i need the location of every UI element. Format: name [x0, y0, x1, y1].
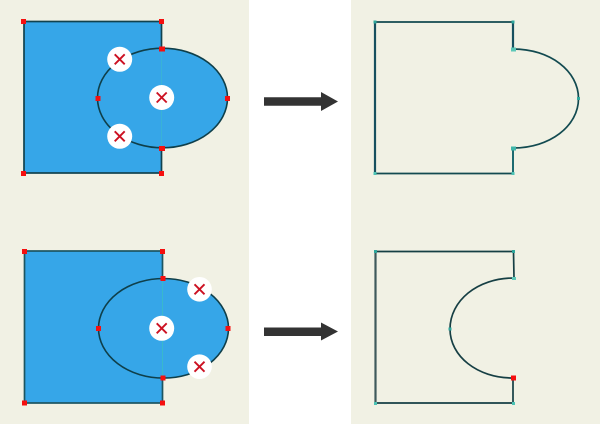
panel: right background [351, 0, 600, 424]
panel: left background [0, 0, 249, 424]
shape: bottom-left rectangle and ellipse union selected [22, 249, 230, 406]
arrow: top [264, 92, 338, 111]
shape: top-left rectangle and ellipse union selected [21, 19, 230, 176]
icon: delete mark bottom-left center [149, 316, 174, 341]
shape: bottom-right subtracted outline [374, 250, 516, 405]
shape: top-right merged outline [374, 20, 580, 175]
icon: delete mark top-left lower [107, 124, 132, 149]
icon: delete mark top-left upper [107, 47, 132, 72]
icon: delete mark top-left center [149, 85, 174, 110]
arrow: bottom [264, 322, 338, 340]
icon: delete mark bottom-left lower [187, 354, 212, 379]
icon: delete mark bottom-left upper [187, 277, 212, 302]
